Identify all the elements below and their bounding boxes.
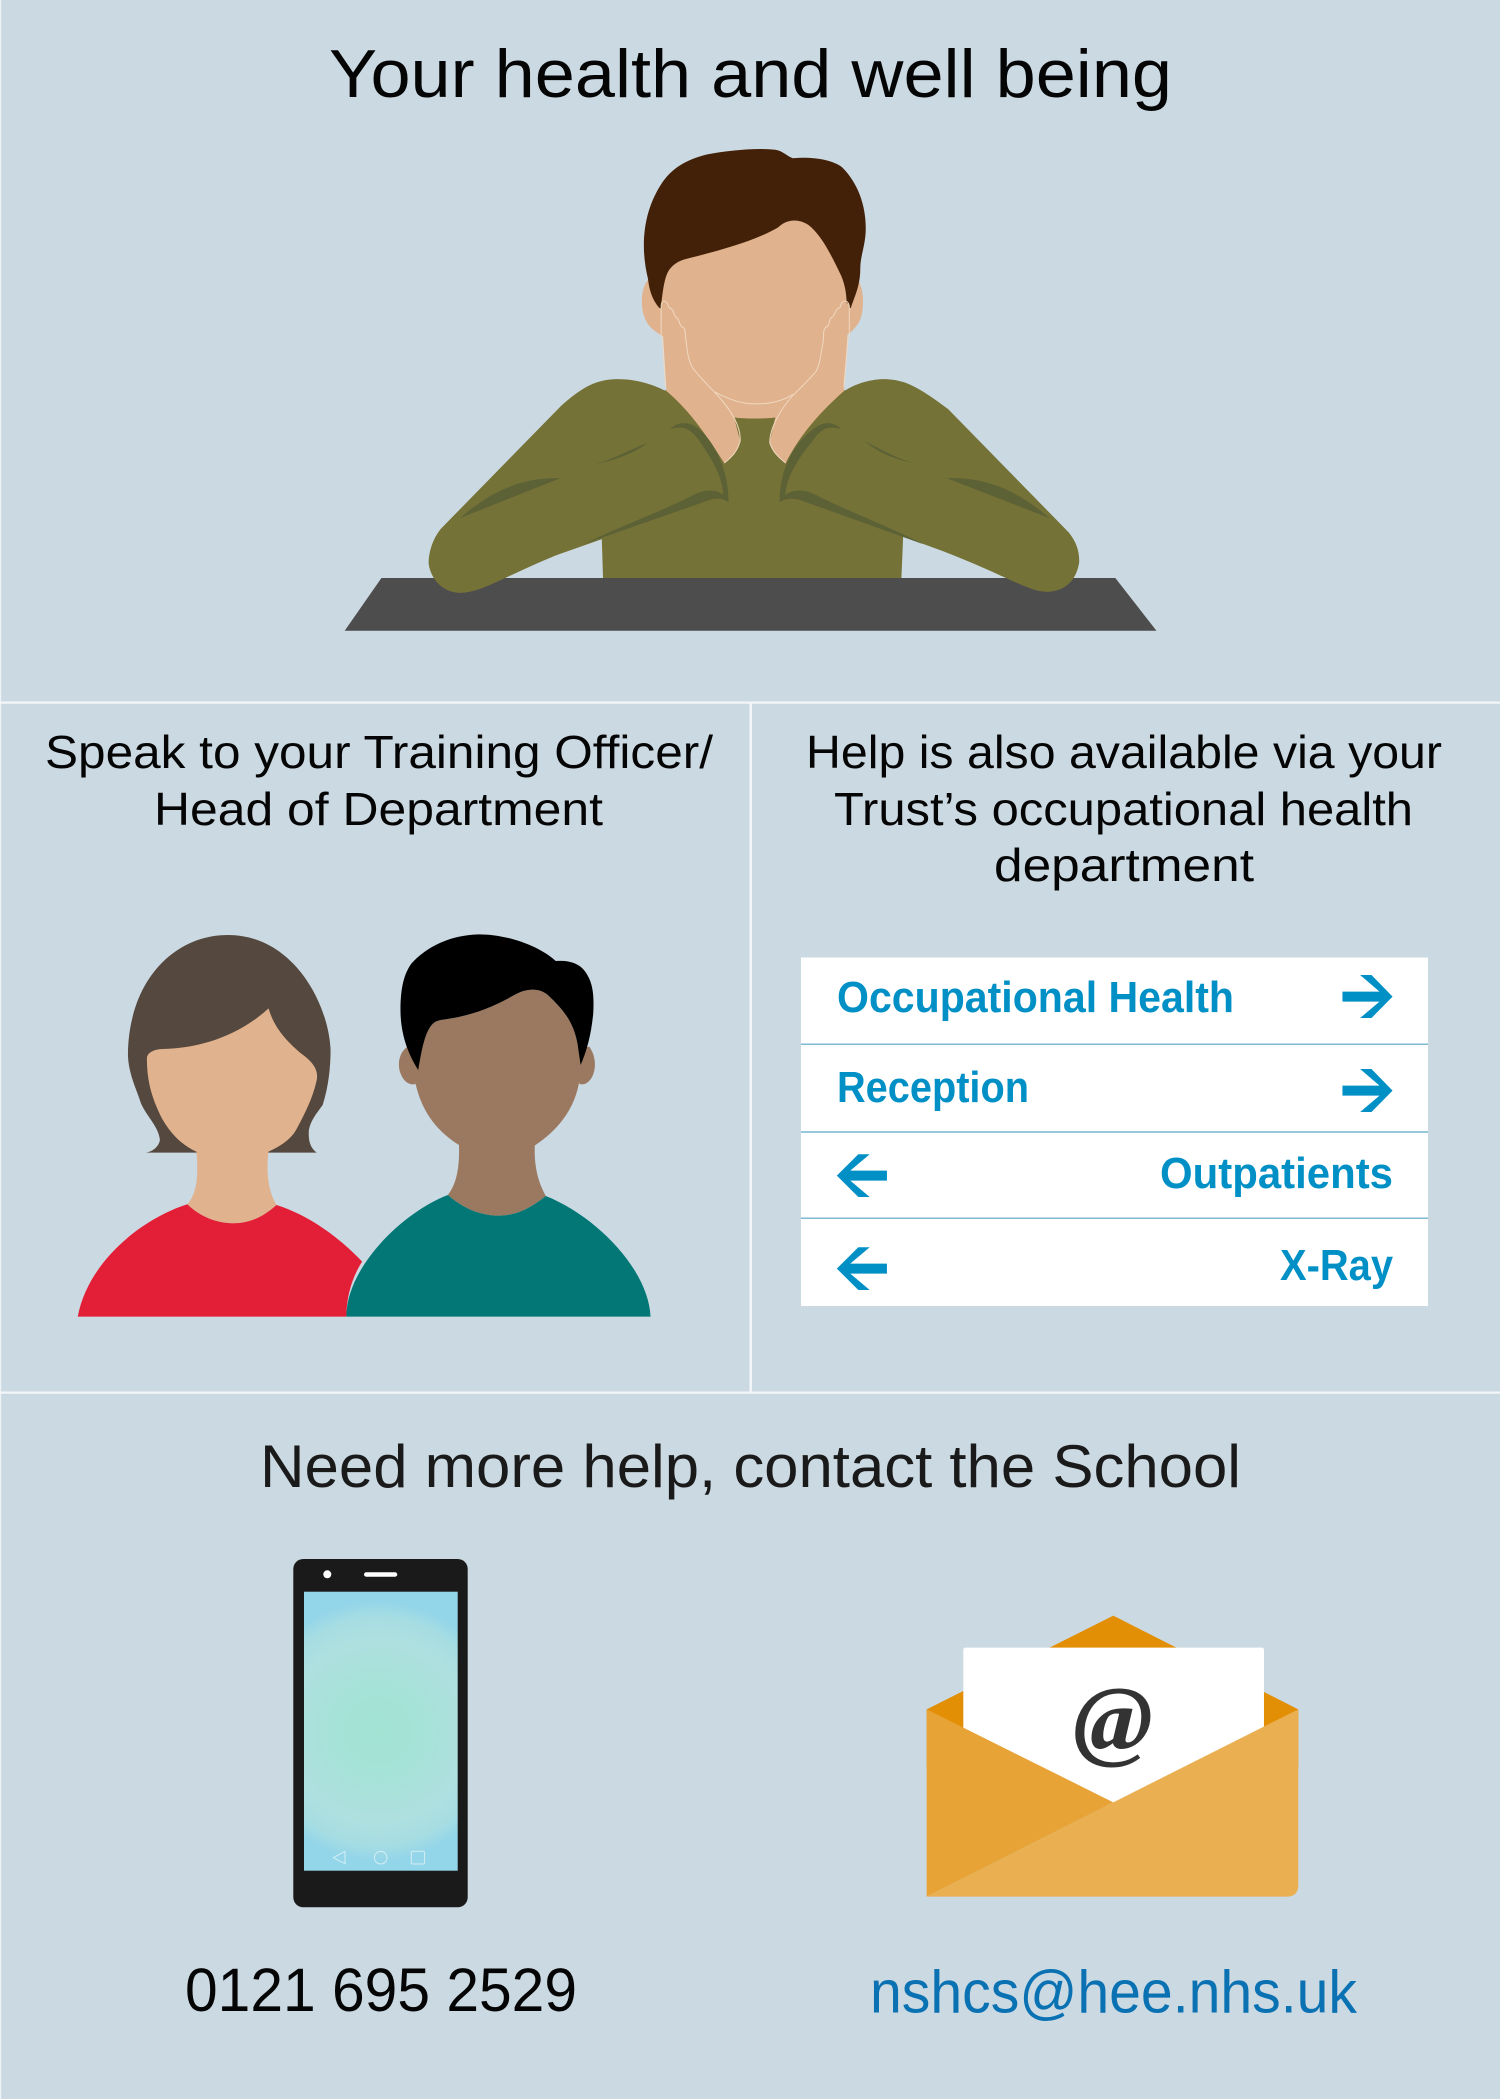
right panel heading: department <box>994 839 1254 891</box>
woman: neck <box>187 1150 276 1223</box>
illustration: two people <box>78 934 651 1317</box>
man: ears <box>399 1047 595 1084</box>
woman: hair <box>128 935 331 1153</box>
right panel heading: Trust’s occupational health <box>834 783 1413 835</box>
phone number: 0121 695 2529 <box>185 1956 577 2024</box>
hair <box>644 149 866 323</box>
sign: occupational health: Occupational Health <box>837 973 1234 1022</box>
hand outlines <box>661 301 849 463</box>
icon: envelope with @ <box>927 1616 1298 1897</box>
icon: smartphone <box>293 1559 468 1907</box>
contact heading: Need more help, contact the School <box>260 1433 1241 1500</box>
woman: red top <box>78 1204 362 1317</box>
sleeve folds <box>460 423 1050 544</box>
sign: outpatients: Outpatients <box>1160 1149 1393 1198</box>
face, neck and hands <box>661 221 849 463</box>
left sleeve <box>429 379 729 593</box>
man: neck <box>448 1143 546 1216</box>
title: Your health and well being <box>329 36 1172 112</box>
ears <box>642 279 863 338</box>
arrows <box>837 975 1393 1290</box>
left panel heading: Head of Department <box>154 783 603 835</box>
left panel heading: Speak to your Training Officer/ <box>45 726 713 778</box>
left panel heading <box>45 726 713 835</box>
sign: reception: Reception <box>837 1063 1029 1112</box>
email address: nshcs@hee.nhs.uk <box>870 1958 1358 2026</box>
man: teal top <box>346 1195 651 1317</box>
sign: x-ray: X-Ray <box>1280 1241 1393 1290</box>
right panel heading <box>806 726 1442 891</box>
torso <box>601 390 904 578</box>
right sleeve <box>780 379 1079 592</box>
icon: envelope with @: @ <box>1073 1668 1153 1770</box>
man: face <box>416 990 581 1156</box>
right panel heading: Help is also available via your <box>806 726 1442 778</box>
signpost panel <box>801 958 1428 1306</box>
desk <box>345 578 1156 631</box>
illustration: stressed person at a desk <box>345 149 1156 631</box>
man: hair <box>400 934 594 1070</box>
woman: face <box>147 1008 317 1159</box>
